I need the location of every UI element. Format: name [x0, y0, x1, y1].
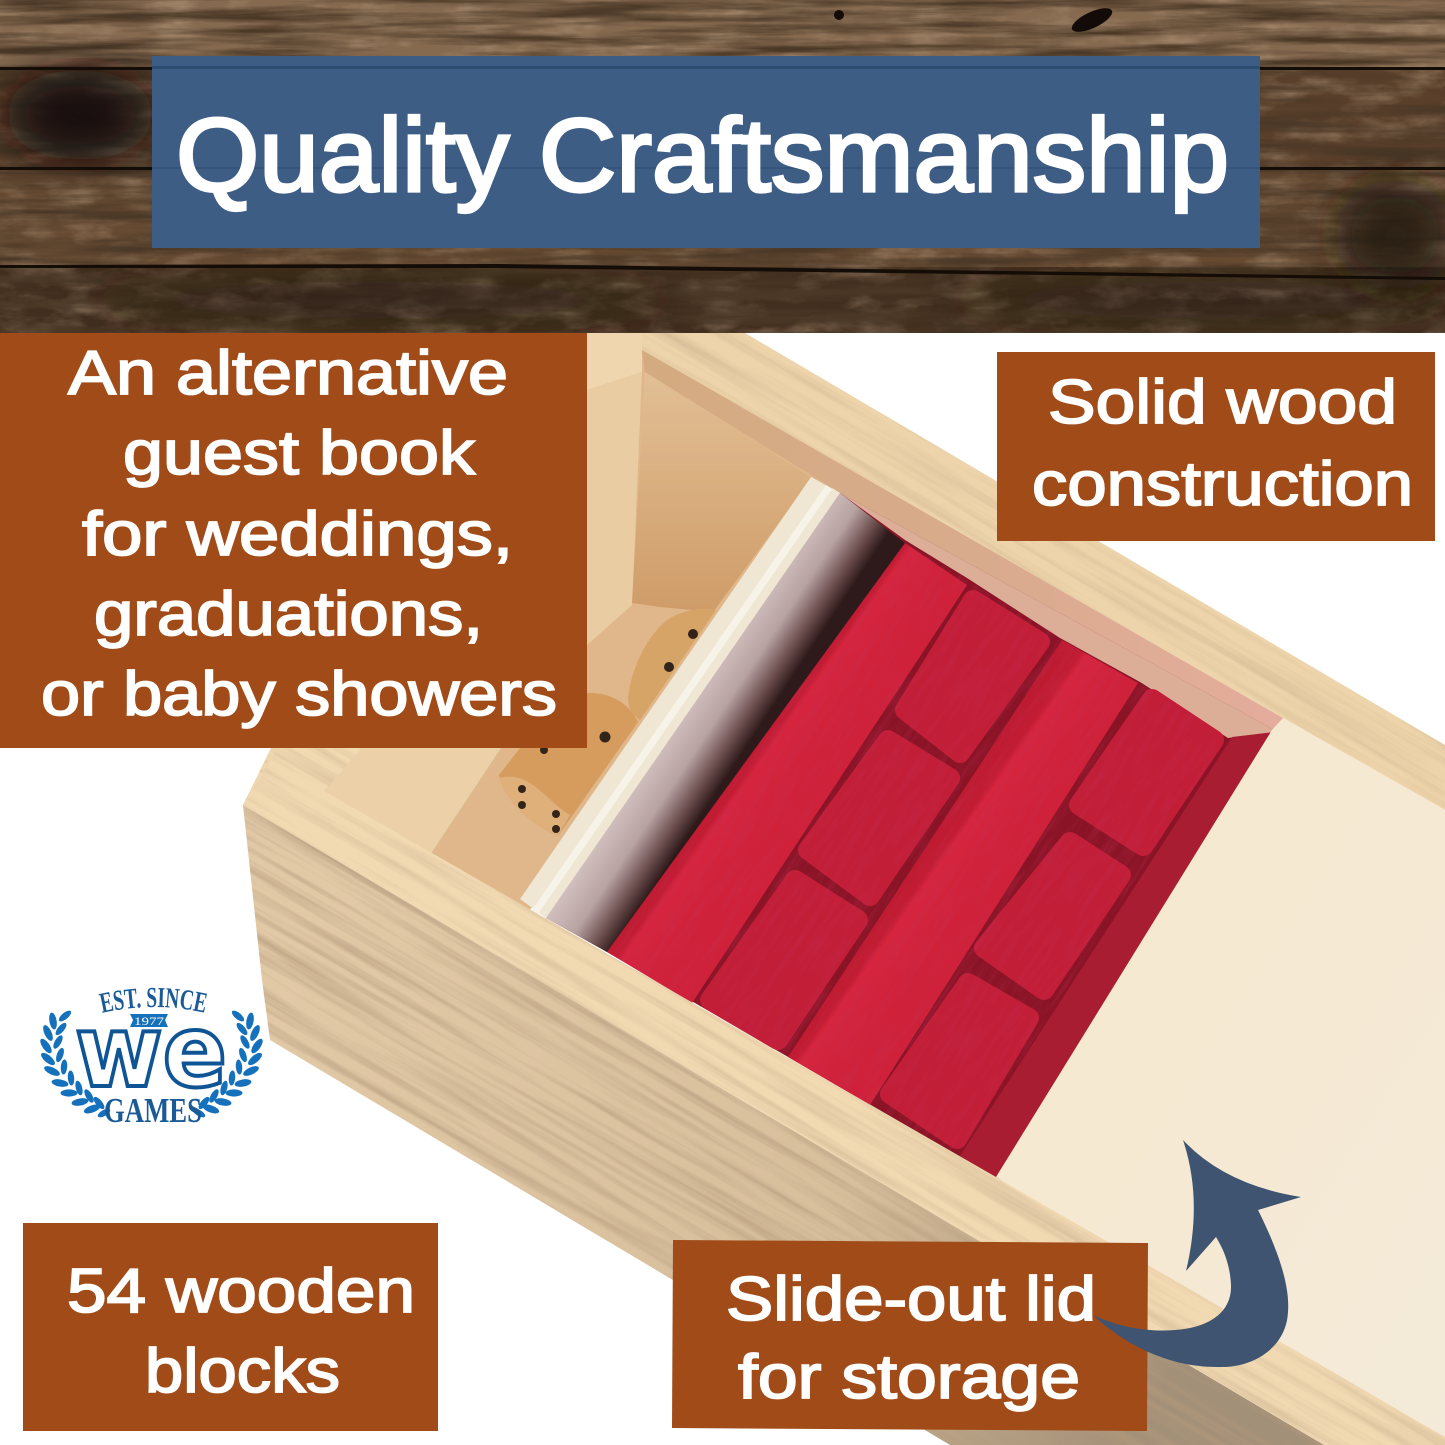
callout: alternative guest book: An alternative [68, 339, 508, 408]
logo: WE Games: 1977 [134, 1014, 164, 1028]
logo: WE Games: GAMES [104, 1091, 202, 1130]
callout: solid wood: construction [1032, 450, 1413, 519]
callout: slide-out lid [672, 1240, 1148, 1431]
callout: alternative guest book: or baby showers [41, 660, 557, 729]
tray interior [520, 477, 1278, 1180]
small blocks [710, 600, 1214, 1139]
wood banner background [0, 0, 1445, 333]
callout: alternative guest book: for weddings, [82, 500, 513, 569]
photo: wooden box with blocks [243, 333, 1445, 1445]
callout: 54 wooden blocks [23, 1223, 438, 1431]
logo: WE Games: EST. SINCE [98, 988, 207, 1013]
callout: 54 wooden blocks: 54 wooden [67, 1257, 415, 1326]
callout: solid wood [997, 352, 1435, 541]
box front face [243, 748, 1445, 1445]
callout: alternative guest book: graduations, [94, 580, 483, 649]
callout: slide-out lid: Slide-out lid [726, 1265, 1096, 1334]
box lid [996, 718, 1445, 1437]
dice [499, 609, 716, 836]
callout: 54 wooden blocks: blocks [145, 1337, 340, 1406]
red strip [960, 732, 1274, 1180]
block texture [607, 543, 1226, 1156]
callout: slide-out lid: for storage [738, 1343, 1080, 1412]
box top rail [642, 333, 1445, 810]
box left compartment [318, 333, 835, 910]
callout: alternative guest book: guest book [123, 419, 476, 488]
arrow: lid slides out [1093, 1140, 1301, 1367]
long block 2 [788, 640, 1138, 1105]
callout: solid wood: Solid wood [1048, 368, 1397, 437]
callout: alternative guest book [0, 333, 587, 748]
logo: WE Games: we [75, 993, 227, 1110]
title panel [152, 56, 1260, 248]
logo: WE Games [40, 988, 263, 1130]
title: Quality Craftsmanship [176, 98, 1229, 214]
long block 1 [607, 543, 967, 1003]
